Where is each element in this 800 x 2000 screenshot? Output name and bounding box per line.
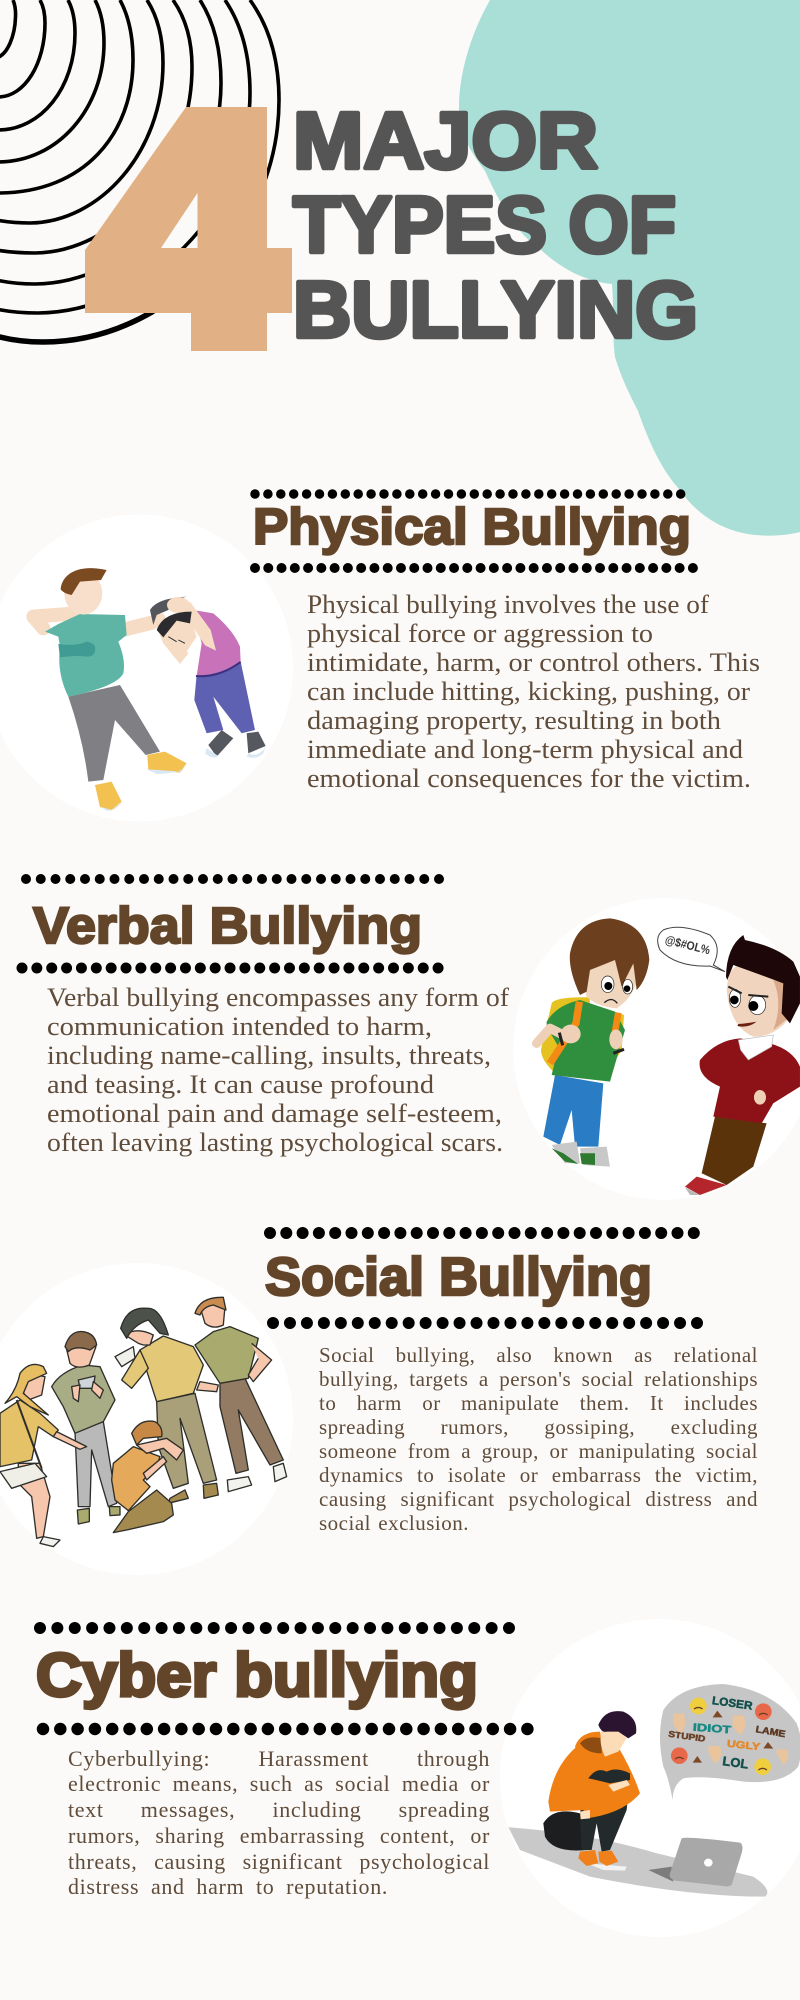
heading: physical bullying: Physical Bullying	[253, 498, 691, 555]
illustration: social bullying	[0, 1297, 287, 1547]
illustration: verbal bullying	[537, 918, 800, 1195]
concentric black rings	[0, 0, 279, 342]
white circle: cyber illustration	[500, 1619, 800, 1937]
text: rumors, sharing embarrassing content, or	[68, 1823, 490, 1848]
text: physical bullying	[307, 590, 760, 793]
speech bubble: @$#OL%	[664, 933, 712, 957]
white circle: physical illustration	[0, 514, 293, 822]
text: cyber bullying	[68, 1746, 490, 1899]
title: MAJOR	[293, 96, 598, 185]
text: spreading rumors, gossiping, excluding	[319, 1415, 758, 1439]
text: bullying, targets a person's social relationships	[319, 1367, 758, 1391]
text: Social bullying, also known as relational	[319, 1343, 758, 1367]
text: threats, causing significant psychological	[68, 1849, 490, 1874]
teal blob background	[459, 0, 800, 536]
heading: social bullying: Social Bullying	[265, 1247, 652, 1307]
text: causing significant psychological distress and	[319, 1487, 758, 1511]
text: social bullying	[319, 1343, 758, 1535]
text: physical bullying: can include hitting, kicking, pushing, or	[307, 677, 750, 706]
text: dynamics to isolate or embarrass the victim,	[319, 1463, 758, 1487]
text: physical bullying: intimidate, harm, or control others. This	[307, 648, 760, 677]
speech bubble with insults: LOL	[722, 1754, 750, 1772]
text: someone from a group, or manipulating social	[319, 1439, 758, 1463]
speech bubble with insults: LAME	[755, 1724, 786, 1739]
text: verbal bullying: emotional pain and damage self-esteem,	[47, 1099, 502, 1128]
text: verbal bullying	[47, 983, 509, 1157]
white circle: social illustration	[0, 1263, 293, 1575]
speech bubble	[658, 927, 725, 972]
illustration: cyber bullying	[508, 1684, 800, 1897]
speech bubble with insults: LOSER	[711, 1695, 753, 1713]
heading: verbal bullying: Verbal Bullying	[33, 897, 422, 954]
title: TYPES OF	[293, 180, 676, 269]
text: distress and harm to reputation.	[68, 1874, 388, 1899]
text: verbal bullying: Verbal bullying encompasses any form of	[47, 983, 509, 1012]
text: Cyberbullying: Harassment through	[68, 1746, 490, 1771]
text: text messages, including spreading	[68, 1797, 490, 1822]
speech bubble with insults: UGLY	[726, 1739, 761, 1753]
heading: cyber bullying: Cyber bullying	[36, 1641, 478, 1709]
text: physical bullying: physical force or aggression to	[307, 619, 653, 648]
speech bubble with insults	[660, 1684, 800, 1800]
text: verbal bullying: including name-calling, insults, threats,	[47, 1041, 491, 1070]
text: verbal bullying: often leaving lasting psychological scars.	[47, 1128, 503, 1157]
big number 4	[85, 107, 292, 351]
text: physical bullying: emotional consequences for the victim.	[307, 764, 751, 793]
text: electronic means, such as social media or	[68, 1771, 490, 1796]
text: physical bullying: immediate and long-term physical and	[307, 735, 743, 764]
text: social exclusion.	[319, 1511, 469, 1535]
text: physical bullying: damaging property, resulting in both	[307, 706, 721, 735]
text: physical bullying: Physical bullying involves the use of	[307, 590, 709, 619]
title	[293, 96, 698, 354]
text: verbal bullying: communication intended to harm,	[47, 1012, 432, 1041]
illustration: physical bullying	[33, 568, 266, 811]
speech bubble with insults: STUPID	[668, 1729, 706, 1744]
title: BULLYING	[293, 265, 698, 354]
speech bubble with insults: IDIOT	[692, 1722, 732, 1736]
white circle: verbal illustration	[513, 898, 800, 1200]
text: verbal bullying: and teasing. It can cause profound	[47, 1070, 434, 1099]
text: to harm or manipulate them. It includes	[319, 1391, 758, 1415]
